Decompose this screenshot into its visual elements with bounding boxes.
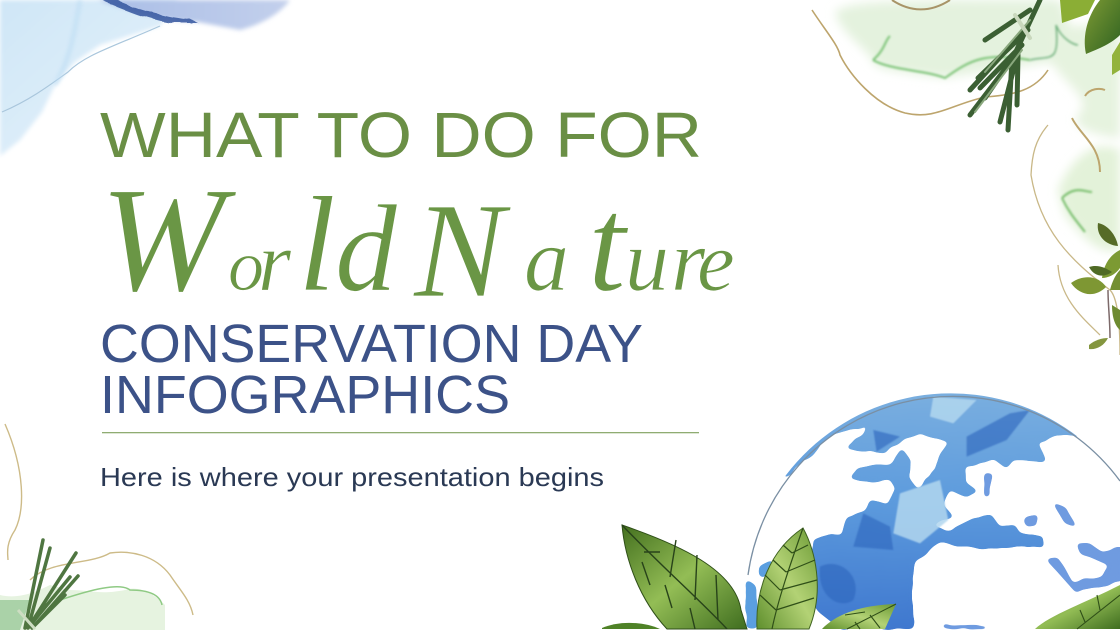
title: line 4: INFOGRAPHICS xyxy=(100,365,510,425)
divider line xyxy=(102,432,699,433)
title: script line: a xyxy=(524,211,569,310)
title: line 1: WHAT TO DO FOR xyxy=(100,99,702,171)
title: script line: N xyxy=(413,176,512,326)
watercolor: top-left blue wash xyxy=(0,0,290,156)
leaf: large left xyxy=(622,525,747,629)
icon: rosemary sprig top right xyxy=(970,0,1040,130)
leaf: bottom right xyxy=(1035,585,1120,629)
globe: colour mottling xyxy=(820,397,1030,603)
watercolor: bottom-left green wash and sprig xyxy=(0,424,193,630)
icon: large leaves top right xyxy=(1060,0,1120,75)
title: script line: t xyxy=(588,170,629,320)
watercolor: top-right green wash xyxy=(812,0,1120,355)
icon: bottom leaves xyxy=(602,525,1120,629)
title: script line: d xyxy=(335,180,428,317)
title: script line: W xyxy=(100,157,237,323)
title: script line: e xyxy=(697,215,735,309)
icon: small leaves right sprig xyxy=(1071,223,1120,349)
leaf: center xyxy=(757,528,817,629)
subtitle: Here is where your presentation begins xyxy=(100,462,604,492)
globe xyxy=(744,373,1120,630)
title: script line: r xyxy=(258,215,292,309)
globe: outline xyxy=(748,396,1120,575)
title: script line: u xyxy=(625,213,669,310)
title: script line: r xyxy=(671,213,706,310)
title: script line: l xyxy=(298,170,336,320)
title: line 3: CONSERVATION DAY xyxy=(100,314,643,374)
leaf: small center xyxy=(822,604,896,629)
title: script line: o xyxy=(228,226,264,306)
globe: oceans xyxy=(747,373,1120,628)
leaf: far left xyxy=(602,623,660,629)
